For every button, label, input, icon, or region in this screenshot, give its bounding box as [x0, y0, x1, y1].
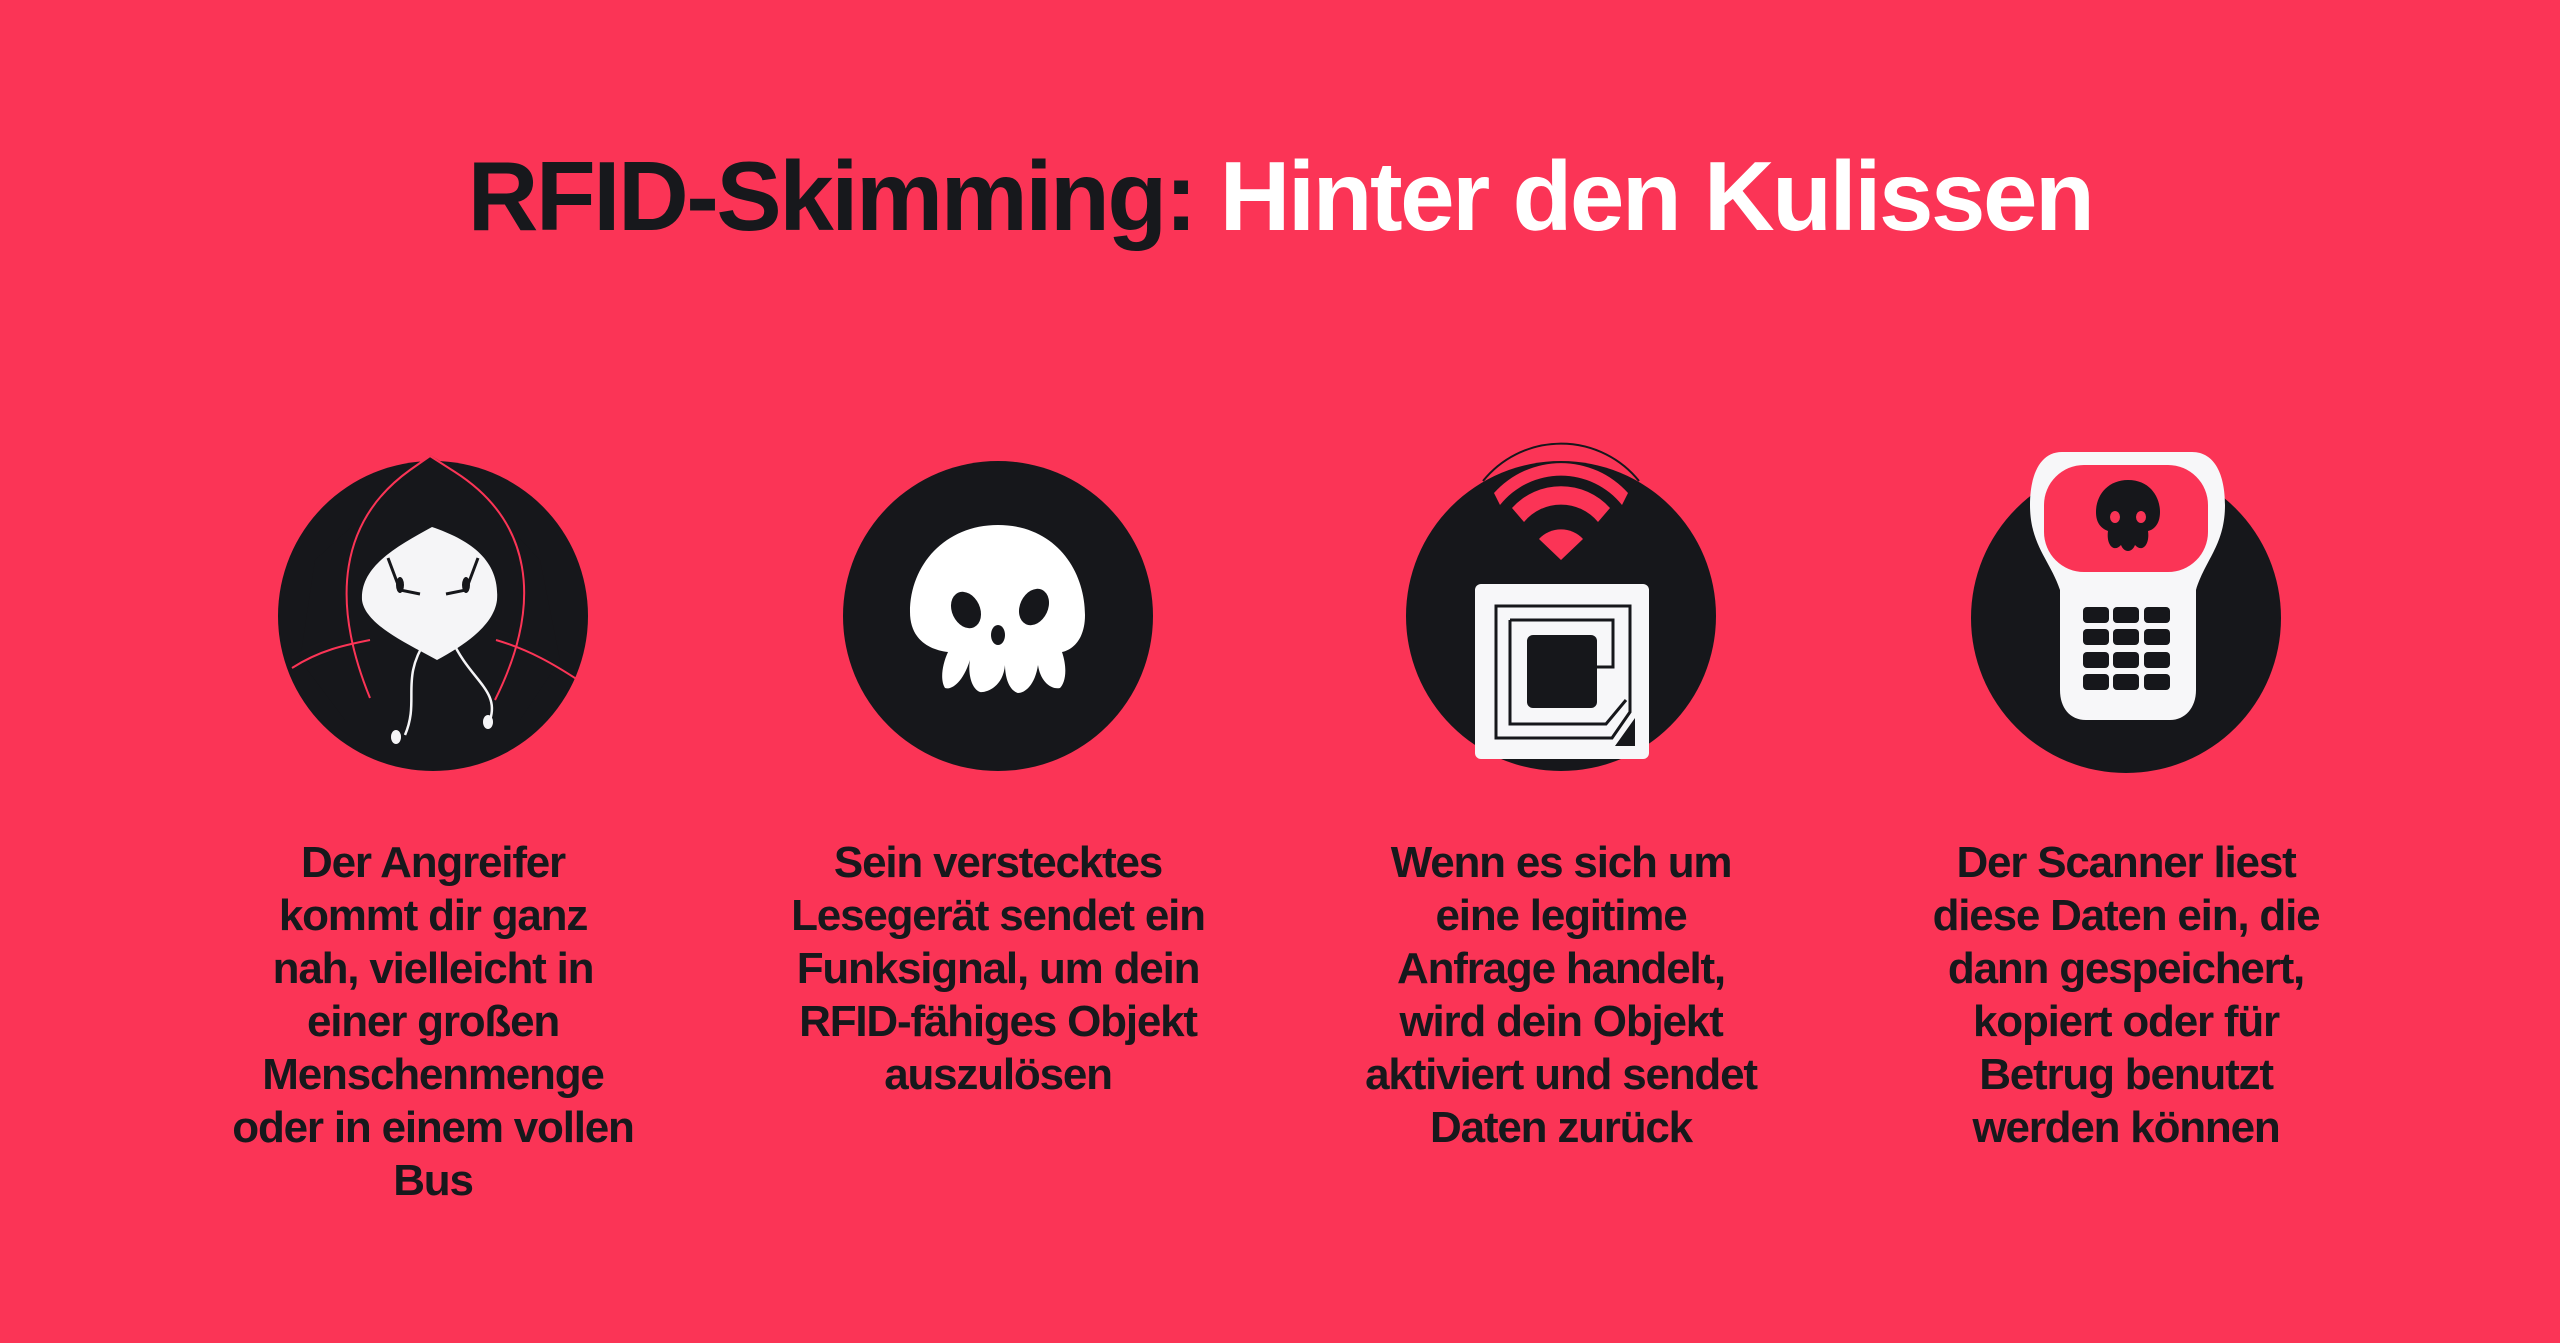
text block: step 4: kopiert oder für	[1973, 997, 2279, 1046]
text block: step 1: einer großen	[307, 997, 559, 1046]
text block: step 3: wird dein Objekt	[1399, 997, 1723, 1046]
text block: step 3: eine legitime	[1436, 891, 1686, 940]
text block: step 1	[232, 838, 634, 1205]
text block: step 2	[791, 838, 1205, 1099]
text block: step 2: RFID-fähiges Objekt	[799, 997, 1197, 1046]
text block: step 3: Wenn es sich um	[1391, 838, 1731, 887]
text block: step 2: Funksignal, um dein	[797, 944, 1199, 993]
text block: step 4	[1933, 838, 2320, 1152]
text block: step 4: Der Scanner liest	[1956, 838, 2296, 887]
text block: step 4: werden können	[1972, 1103, 2280, 1152]
text block: step 2: Lesegerät sendet ein	[791, 891, 1205, 940]
text block: step 3: Anfrage handelt,	[1397, 944, 1725, 993]
icon: skull	[843, 461, 1153, 771]
text block: step 3: aktiviert und sendet	[1365, 1050, 1757, 1099]
text block: step 4: diese Daten ein, die	[1933, 891, 2319, 940]
icon: hooded attacker	[278, 455, 588, 771]
text block: step 1: Der Angreifer	[301, 838, 565, 887]
text block: step 4: Betrug benutzt	[1979, 1050, 2273, 1099]
text block: step 3	[1365, 838, 1758, 1152]
icon: RFID chip with signal	[1406, 444, 1716, 771]
icon: skimming scanner	[1971, 452, 2281, 773]
text block: step 2: Sein verstecktes	[834, 838, 1162, 887]
text block: step 3: Daten zurück	[1430, 1103, 1692, 1152]
text block: step 1: nah, vielleicht in	[273, 944, 593, 993]
text block: step 1: kommt dir ganz	[279, 891, 587, 940]
text block: step 1: oder in einem vollen	[232, 1103, 634, 1152]
title: RFID-Skimming: Hinter den Kulissen	[468, 141, 2092, 251]
text block: step 2: auszulösen	[884, 1050, 1112, 1099]
text block: step 1: Menschenmenge	[262, 1050, 604, 1099]
text block: step 1: Bus	[393, 1156, 473, 1205]
text block: step 4: dann gespeichert,	[1948, 944, 2304, 993]
